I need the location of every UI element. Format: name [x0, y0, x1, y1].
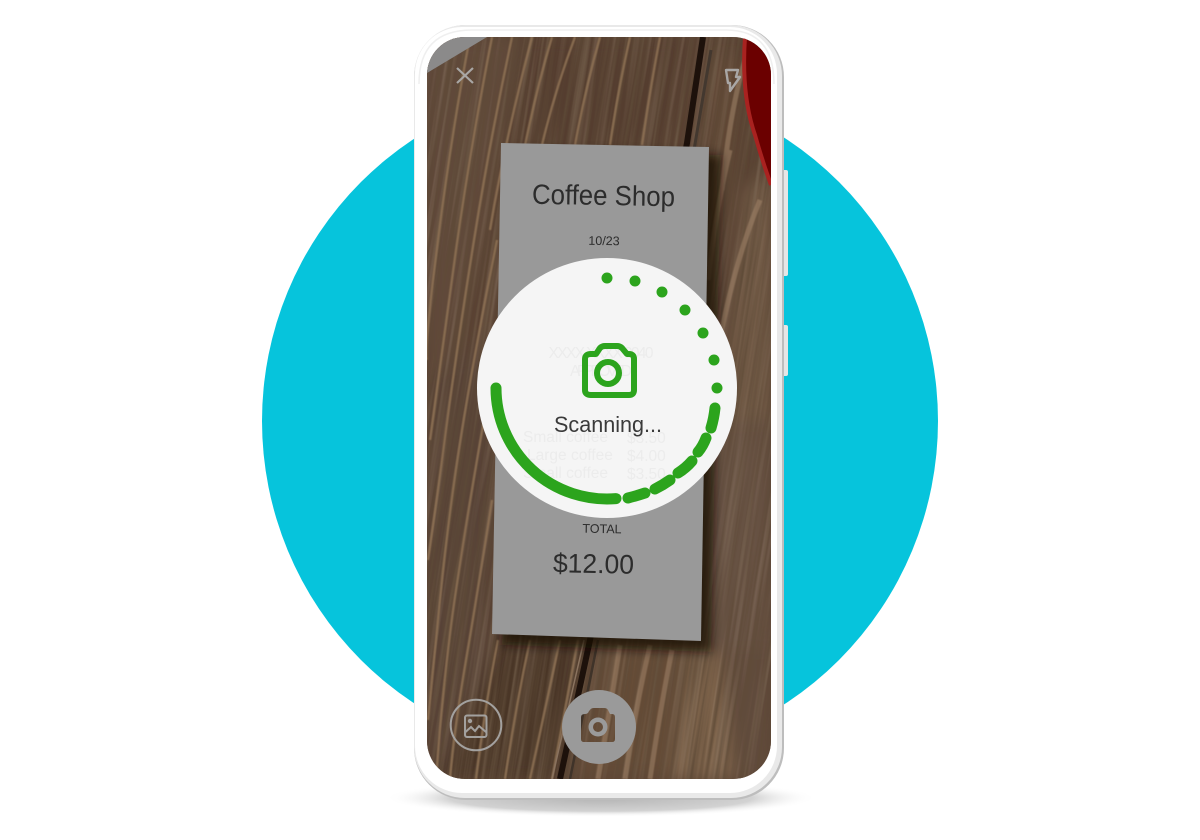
wood crack: [552, 37, 711, 779]
receipt date: 10/23: [588, 234, 620, 248]
dotted progress points: [607, 278, 717, 388]
faint receipt text: $4.00: [627, 448, 666, 465]
side button: volume: [782, 325, 788, 376]
phone: [414, 25, 788, 800]
faint receipt text: Small coffee: [523, 429, 608, 446]
gallery button: [451, 700, 501, 750]
faint receipt text: $3.50: [627, 466, 666, 483]
dashed progress segments: [628, 408, 715, 498]
faint receipt text: $3.50: [627, 430, 666, 447]
phone floor shadow: [385, 779, 817, 817]
receipt title: Coffee Shop: [532, 179, 675, 212]
faint receipt text: Large coffee: [527, 447, 613, 464]
receipt total label: TOTAL: [582, 522, 622, 536]
scanning overlay: [477, 258, 737, 518]
faint receipt text: APPROVED: [570, 363, 632, 380]
camera screen: [427, 37, 771, 779]
progress ring: [496, 278, 717, 499]
receipt: [492, 143, 709, 641]
overlay disc: [477, 258, 737, 518]
scanning label: Scanning...: [554, 412, 662, 437]
faint receipt text: [523, 345, 666, 483]
flash icon: [726, 70, 740, 91]
background teal circle: [262, 83, 938, 759]
camera icon: [585, 346, 634, 395]
faint receipt text: XXXX XXXX 0040: [548, 345, 654, 362]
receipt shadow: [502, 150, 721, 652]
receipt total amount: $12.00: [553, 548, 634, 580]
side button: power: [782, 170, 788, 276]
top close icon: [457, 68, 473, 83]
solid progress arc: [496, 388, 616, 499]
wood background: [427, 37, 771, 779]
faint receipt text: Small coffee: [523, 465, 608, 482]
phone body: [414, 25, 784, 800]
red plate: [744, 37, 771, 185]
grey corner object: [427, 37, 487, 73]
shutter button: [562, 690, 636, 764]
